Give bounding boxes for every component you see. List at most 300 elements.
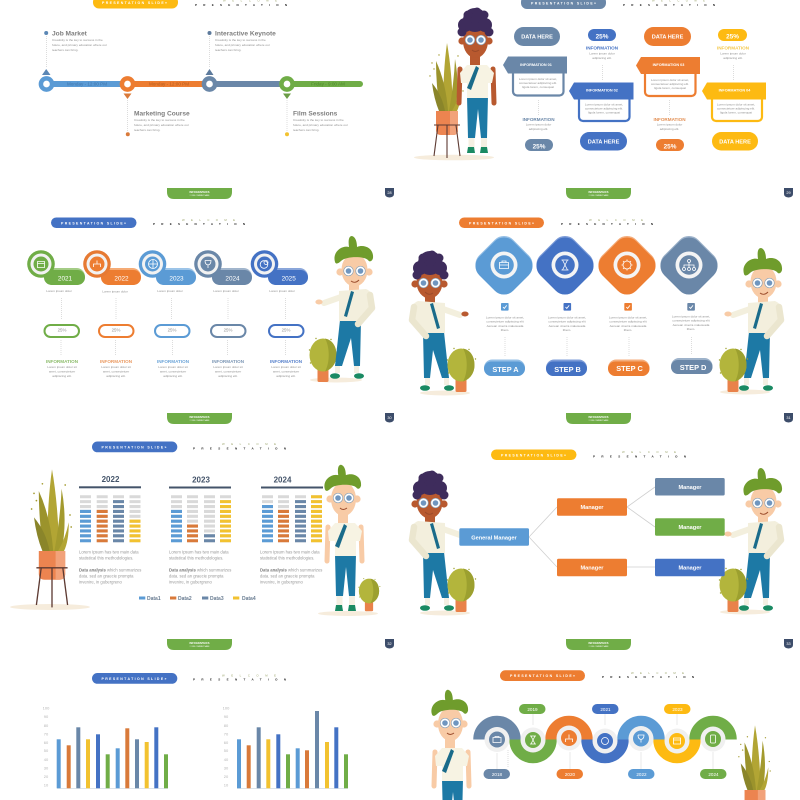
data pills: DATA HERE <box>652 35 684 41</box>
panel: slide 30 yearly steps <box>27 218 394 424</box>
box: manager slate <box>655 478 725 496</box>
title pill: PRESENTATION SLIDE» <box>469 221 534 225</box>
card: information 02: INFORMATION 02 <box>586 88 618 92</box>
percentage capsules <box>44 325 304 337</box>
information labels: Lorem ipsum dolor <box>526 122 551 126</box>
card: information 04: ligula lorem, consequat <box>720 110 752 114</box>
bar chart left <box>43 706 168 788</box>
footer tab: © 2024 COMPANY NAME <box>589 194 609 197</box>
page number badge: 29 <box>786 191 791 195</box>
information 2023: INFORMATION <box>157 359 190 364</box>
header wordmark right <box>602 671 694 679</box>
text: marketing course <box>134 110 190 132</box>
page number badge <box>784 639 793 648</box>
column chart 2023: 2023 <box>192 476 210 484</box>
bar chart right: 80 <box>224 723 229 728</box>
page number badge <box>385 639 394 648</box>
chart legend <box>139 596 256 602</box>
information 2021: INFORMATION <box>46 359 79 364</box>
information labels: INFORMATION <box>586 46 619 50</box>
bar chart right: 10 <box>224 782 229 788</box>
data pills: DATA HERE <box>588 139 620 145</box>
step descriptions: Lorem ipsum dolor sit amet, <box>486 316 524 320</box>
header wordmark right: WELCOME <box>631 671 684 675</box>
header wordmark <box>153 218 245 226</box>
footer tab: © 2024 COMPANY NAME <box>190 645 210 648</box>
card: information 04: consectetuer adipiscing elit. <box>717 106 755 110</box>
footer tab: © 2024 COMPANY NAME <box>589 645 609 648</box>
title pill <box>93 0 178 8</box>
percent pills: 25% <box>533 143 546 150</box>
information 2025: Lorem ipsum dolor sit <box>271 365 301 369</box>
card: information 04 <box>702 82 766 121</box>
bar chart right <box>223 706 348 788</box>
text: job market: teachers can bring. <box>52 48 78 52</box>
chart notes 2023: statistical this methodologies. <box>169 556 223 560</box>
step captions: Lorem ipsum dolor <box>102 290 128 294</box>
page number badge <box>784 188 793 198</box>
step descriptions: libero. <box>624 328 632 332</box>
information labels: INFORMATION <box>653 117 686 122</box>
information 2025: adipiscing elit. <box>276 374 296 378</box>
step 2022 <box>83 250 141 285</box>
text: job market <box>52 30 107 52</box>
text: marketing course: Marketing Course <box>134 110 190 118</box>
information labels: adipiscing elit. <box>723 56 743 60</box>
panel: slide 34 bar charts <box>43 670 771 800</box>
box: manager green: Manager <box>678 525 702 531</box>
header wordmark: PRESENTATION <box>195 3 287 7</box>
step buttons: STEP D <box>680 363 707 372</box>
title pill right: PRESENTATION SLIDE» <box>510 674 575 678</box>
page number badge: 31 <box>786 416 791 420</box>
year pills: 2019 <box>527 707 538 712</box>
text: interactive keynote: future, and primary education where our <box>215 43 270 47</box>
wave nodes <box>484 726 726 754</box>
illustration: boy presenter left <box>411 470 476 616</box>
step 2024 <box>194 250 252 285</box>
header wordmark: PRESENTATION <box>193 446 286 450</box>
title pill: PRESENTATION SLIDE» <box>61 221 126 225</box>
text: film sessions <box>293 110 348 132</box>
information labels: INFORMATION <box>717 46 750 50</box>
step captions: Lorem ipsum dolor <box>269 289 295 293</box>
step descriptions: Aenean viverra malesuada <box>487 324 524 328</box>
step 2023 <box>139 250 196 285</box>
illustration: presenter right <box>719 468 782 614</box>
box: manager orange lower: Manager <box>580 566 604 572</box>
percent pills: 25% <box>664 143 677 150</box>
header wordmark: PRESENTATION <box>193 678 286 682</box>
title pill: PRESENTATION SLIDE» <box>102 1 167 5</box>
card: information 03: ligula lorem, consequat <box>654 86 686 90</box>
footer tab: INFOGRAPHICS <box>589 415 609 419</box>
step descriptions: Aenean viverra malesuada <box>673 323 710 327</box>
step descriptions: Aenean viverra malesuada <box>549 324 586 328</box>
card: information 01: INFORMATION 01 <box>520 63 552 67</box>
header wordmark <box>623 0 715 7</box>
column chart 2024 <box>261 476 323 542</box>
panel: slide 31 four steps <box>411 218 793 424</box>
card: information 02 <box>569 82 634 121</box>
data pills: DATA HERE <box>719 139 751 145</box>
card: information 01: ligula lorem, consequat <box>522 85 554 89</box>
footer tab <box>566 188 631 199</box>
step descriptions: consectetuer adipiscing elit <box>548 320 586 324</box>
diamond: gear <box>593 231 661 300</box>
wave timeline ribbon <box>479 722 731 758</box>
text: film sessions: Film Sessions <box>293 110 338 118</box>
direction triangles <box>42 69 291 99</box>
header wordmark: PRESENTATION <box>593 454 686 458</box>
information 2022: INFORMATION <box>100 359 133 364</box>
chart notes 2024: Lorem Ipsum has two main data <box>260 550 320 554</box>
header wordmark: PRESENTATION <box>153 222 245 226</box>
percent pills: 25% <box>596 33 609 40</box>
box: general manager: General Manager <box>471 536 518 542</box>
footer tab: © 2024 COMPANY NAME <box>190 419 210 422</box>
card: information 01: consectetuer adipiscing elit. <box>519 81 557 85</box>
step descriptions: consectetuer adipiscing elit <box>609 320 647 324</box>
bar chart right: 20 <box>224 774 229 779</box>
title pill <box>92 442 177 452</box>
information 2024: amet, consectetuer <box>215 370 241 374</box>
footer tab: INFOGRAPHICS <box>589 641 609 645</box>
timeline bars <box>50 81 363 87</box>
text: interactive keynote: Interactive Keynote <box>215 30 276 38</box>
footer tab: © 2024 COMPANY NAME <box>190 194 210 197</box>
column chart 2023 <box>169 476 231 542</box>
percentage capsules: 25% <box>112 328 120 333</box>
step descriptions: Lorem ipsum dolor sit amet, <box>609 316 647 320</box>
information labels: adipiscing elit. <box>529 127 548 131</box>
step 2024: 2024 <box>225 276 240 282</box>
step captions: Lorem ipsum dolor <box>46 289 72 293</box>
box: manager slate: Manager <box>678 485 702 491</box>
bar chart left: 70 <box>44 732 49 736</box>
chart notes 2022: statistical this methodologies. <box>79 556 133 560</box>
header wordmark: WELCOME <box>222 674 276 678</box>
information 2025 <box>270 359 303 378</box>
column chart 2024: 2024 <box>274 476 292 484</box>
bar chart left: 60 <box>44 740 49 745</box>
chart notes 2022 <box>79 550 141 584</box>
data pills <box>514 27 758 150</box>
information 2024: INFORMATION <box>212 359 245 364</box>
column chart 2022: 2022 <box>102 475 120 484</box>
footer tab: INFOGRAPHICS <box>190 641 210 645</box>
panel: slide 32 stacked bars <box>10 442 394 650</box>
timeline bars: Friday - 9:00 AM <box>311 82 345 87</box>
header wordmark: PRESENTATION <box>623 3 715 7</box>
footer tab: INFOGRAPHICS <box>190 415 210 419</box>
step 2023: 2023 <box>169 276 184 282</box>
title pill <box>92 673 177 684</box>
step descriptions: libero. <box>501 328 509 332</box>
footer tab <box>566 639 631 650</box>
header wordmark <box>193 442 286 450</box>
illustration: boy presenter left <box>411 250 476 396</box>
text: marketing course: future, and primary education where our <box>134 123 189 127</box>
bar chart right: 30 <box>224 766 229 770</box>
step 2025: 2025 <box>282 276 296 282</box>
information labels: Lorem ipsum dolor <box>657 122 682 126</box>
card: information 03 <box>636 57 700 96</box>
chart notes 2024: data. sed an graecie prompta <box>260 574 315 578</box>
title pill: PRESENTATION SLIDE» <box>102 677 167 681</box>
footer tab <box>167 639 232 650</box>
text: film sessions: Creativity is the key to success in the <box>293 118 344 122</box>
box: manager orange upper <box>557 498 627 516</box>
information 2024: adipiscing elit. <box>218 374 238 378</box>
chart legend: Data1 <box>147 596 161 602</box>
box: manager green <box>655 518 725 536</box>
header wordmark <box>593 450 686 458</box>
connector dots <box>44 31 289 136</box>
diamond: briefcase <box>470 231 538 300</box>
step buttons: STEP A <box>492 365 519 374</box>
page number badge: 32 <box>387 642 392 646</box>
chart notes 2022: data. sed an graecie prompta <box>79 574 134 578</box>
card: information 03: INFORMATION 03 <box>653 63 684 67</box>
footer tab <box>566 413 631 424</box>
step 2025 <box>251 250 308 285</box>
text: job market: Creativity is the key to success in the <box>52 38 103 42</box>
illustration: plant <box>738 725 771 800</box>
bar chart left: 50 <box>44 748 49 753</box>
header wordmark: WELCOME <box>222 442 276 446</box>
step buttons: STEP B <box>554 365 581 374</box>
footer tab: INFOGRAPHICS <box>589 190 609 194</box>
bar chart right: 60 <box>224 740 229 745</box>
bar chart left: 20 <box>44 774 49 779</box>
year pills: 2020 <box>565 772 576 777</box>
header wordmark right: PRESENTATION <box>602 675 694 679</box>
year pills: 2024 <box>708 772 719 777</box>
bar chart right: 40 <box>224 757 229 762</box>
card: information 01: Lorem ipsum dolor sit amet, <box>519 77 557 81</box>
title pill right <box>500 670 585 681</box>
chart notes 2024: invenire, in gubergreno <box>260 580 304 584</box>
information 2021: adipiscing elit. <box>52 374 72 378</box>
header wordmark: WELCOME <box>622 450 676 454</box>
text: interactive keynote <box>215 30 276 52</box>
step descriptions <box>486 314 710 332</box>
text: interactive keynote: teachers can bring. <box>215 48 241 52</box>
text: job market: Job Market <box>52 30 88 38</box>
text: film sessions: teachers can bring. <box>293 128 319 132</box>
card: information 04: INFORMATION 04 <box>719 88 751 92</box>
step captions <box>46 289 295 294</box>
illustration: potted plant <box>10 469 90 610</box>
timeline bars: Monday - 12:00 PM <box>149 82 189 87</box>
card: information 03: Lorem ipsum dolor sit amet, <box>651 78 689 82</box>
box: manager orange lower <box>557 559 627 576</box>
chart notes 2024 <box>260 550 322 584</box>
step descriptions: consectetuer adipiscing elit <box>672 319 710 323</box>
header wordmark: WELCOME <box>589 218 643 222</box>
illustration: presenter right <box>719 248 782 394</box>
information 2024: Lorem ipsum dolor sit <box>213 365 243 369</box>
chart notes 2024: statistical this methodologies. <box>260 556 314 560</box>
chart notes 2022: Lorem Ipsum has two main data <box>79 550 139 554</box>
percentage capsules: 25% <box>224 328 232 333</box>
information 2023: amet, consectetuer <box>160 370 186 374</box>
bar chart left: 90 <box>44 714 49 719</box>
chart notes 2023: data. sed an graecie prompta <box>169 574 224 578</box>
box: general manager <box>459 528 529 546</box>
page number badge <box>784 413 793 422</box>
step buttons: STEP C <box>616 364 643 373</box>
step captions: Lorem ipsum dolor <box>157 289 183 293</box>
card: information 02: consectetuer adipiscing elit. <box>585 106 623 110</box>
information 2021: Lorem ipsum dolor sit <box>47 365 77 369</box>
bar chart left: 40 <box>44 757 49 762</box>
text: interactive keynote: Creativity is the key to success in the <box>215 38 266 42</box>
bar chart right: 90 <box>224 714 229 719</box>
information labels: adipiscing elit. <box>660 127 679 131</box>
information labels: Lorem ipsum dolor <box>720 52 746 56</box>
bar chart right: 100 <box>223 706 230 710</box>
box: manager blue <box>655 559 725 576</box>
year pills <box>484 704 726 779</box>
information 2025: amet, consectetuer <box>273 370 299 374</box>
step 2021 <box>27 250 85 285</box>
card: information 01 <box>503 56 567 96</box>
step descriptions: consectetuer adipiscing elit <box>486 320 524 324</box>
information 2021: amet, consectetuer <box>49 370 75 374</box>
title pill: PRESENTATION SLIDE» <box>501 453 566 457</box>
timeline bars: Monday - 12:00 PM <box>67 82 107 87</box>
data pills: DATA HERE <box>521 35 553 41</box>
year pills: 2022 <box>636 772 647 777</box>
bar chart left: 30 <box>44 766 49 770</box>
box: manager blue: Manager <box>678 566 702 572</box>
title pill <box>521 0 606 9</box>
step buttons <box>484 358 712 376</box>
information 2024 <box>212 359 245 378</box>
chart notes 2022: invenire, in gubergreno <box>79 580 123 584</box>
footer tab <box>167 188 232 199</box>
step descriptions: Lorem ipsum dolor sit amet, <box>672 314 710 318</box>
chart notes 2023: Data analysis which summarizes <box>169 568 231 572</box>
page number badge: 33 <box>786 642 791 646</box>
chart notes 2023: invenire, in gubergreno <box>169 580 213 584</box>
title pill: PRESENTATION SLIDE» <box>102 445 167 449</box>
information labels: INFORMATION <box>522 117 555 122</box>
bar chart left: 10 <box>44 782 49 788</box>
diamond: hourglass <box>531 231 599 300</box>
title pill <box>491 450 576 460</box>
card: information 03: consectetuer adipiscing elit. <box>651 82 689 86</box>
information 2025: INFORMATION <box>270 359 303 364</box>
text: job market: future, and primary education where our <box>52 43 107 47</box>
step 2022: 2022 <box>114 276 129 282</box>
footer tab: INFOGRAPHICS <box>190 190 210 194</box>
year pills: 2023 <box>672 707 683 712</box>
bar chart left: 100 <box>43 706 50 710</box>
panel: slide 33 org chart <box>411 450 793 650</box>
diamond: network <box>655 231 723 300</box>
header wordmark <box>193 674 286 682</box>
information 2022 <box>100 359 133 378</box>
header wordmark: PRESENTATION <box>561 222 653 226</box>
title pill <box>51 218 136 228</box>
chart notes 2024: Data analysis which summarizes <box>260 568 322 572</box>
timeline nodes <box>41 78 293 90</box>
information 2022: amet, consectetuer <box>103 370 129 374</box>
card: information 04: Lorem ipsum dolor sit amet, <box>717 102 755 106</box>
step 2021: 2021 <box>58 276 73 282</box>
information 2022: Lorem ipsum dolor sit <box>101 365 131 369</box>
illustration: boy with plant <box>414 8 494 160</box>
percentage capsules: 25% <box>168 328 176 333</box>
information labels: adipiscing elit. <box>592 56 612 60</box>
percent pills: 25% <box>726 33 739 40</box>
header wordmark <box>195 0 287 7</box>
card: information 02: ligula lorem, consequat <box>588 110 620 114</box>
step descriptions: libero. <box>563 328 571 332</box>
panel: slide 28 timeline <box>41 0 394 199</box>
page number badge <box>385 413 394 422</box>
bar chart right: 70 <box>224 732 229 736</box>
page number badge: 30 <box>387 416 392 420</box>
panel: slide 29 information cards <box>414 0 793 199</box>
percentage capsules: 25% <box>58 328 66 333</box>
footer tab: © 2024 COMPANY NAME <box>589 419 609 422</box>
step captions: Lorem ipsum dolor <box>213 289 239 293</box>
text: film sessions: future, and primary education where our <box>293 123 348 127</box>
illustration: standing presenter <box>431 690 469 800</box>
percent pills <box>525 29 747 151</box>
title pill: PRESENTATION SLIDE» <box>531 2 596 6</box>
bar chart right: 50 <box>224 748 229 753</box>
information 2023: adipiscing elit. <box>163 374 183 378</box>
step descriptions: Aenean viverra malesuada <box>610 324 647 328</box>
percentage capsules: 25% <box>282 328 290 333</box>
footer tab <box>167 413 232 424</box>
chart legend: Data3 <box>210 596 224 602</box>
step descriptions: Lorem ipsum dolor sit amet, <box>548 316 586 320</box>
chart legend: Data2 <box>178 596 192 602</box>
text: marketing course: Creativity is the key to success in the <box>134 118 185 122</box>
card: information 02: Lorem ipsum dolor sit amet, <box>585 102 623 106</box>
title pill <box>459 218 544 228</box>
chart notes 2023: Lorem Ipsum has two main data <box>169 550 229 554</box>
header wordmark <box>561 218 653 226</box>
check boxes <box>501 303 695 311</box>
information 2023: Lorem ipsum dolor sit <box>158 365 188 369</box>
year pills: 2021 <box>600 707 611 712</box>
illustration: presenter with cactus <box>318 465 380 616</box>
information 2022: adipiscing elit. <box>106 374 126 378</box>
box: manager orange upper: Manager <box>580 505 604 511</box>
bar chart left: 80 <box>44 723 49 728</box>
page number badge: 28 <box>387 191 392 195</box>
illustration: presenter and cactus <box>309 236 373 382</box>
chart notes 2022: Data analysis which summarizes <box>79 568 141 572</box>
information labels <box>522 46 750 131</box>
information 2023 <box>157 359 190 378</box>
information labels: Lorem ipsum dolor <box>589 52 615 56</box>
information 2021 <box>46 359 79 378</box>
step descriptions: libero. <box>687 327 695 331</box>
column chart 2022 <box>79 475 141 542</box>
header wordmark: WELCOME <box>182 218 235 222</box>
chart legend: Data4 <box>242 596 256 602</box>
year pills: 2018 <box>492 772 503 777</box>
chart notes 2023 <box>169 550 231 584</box>
